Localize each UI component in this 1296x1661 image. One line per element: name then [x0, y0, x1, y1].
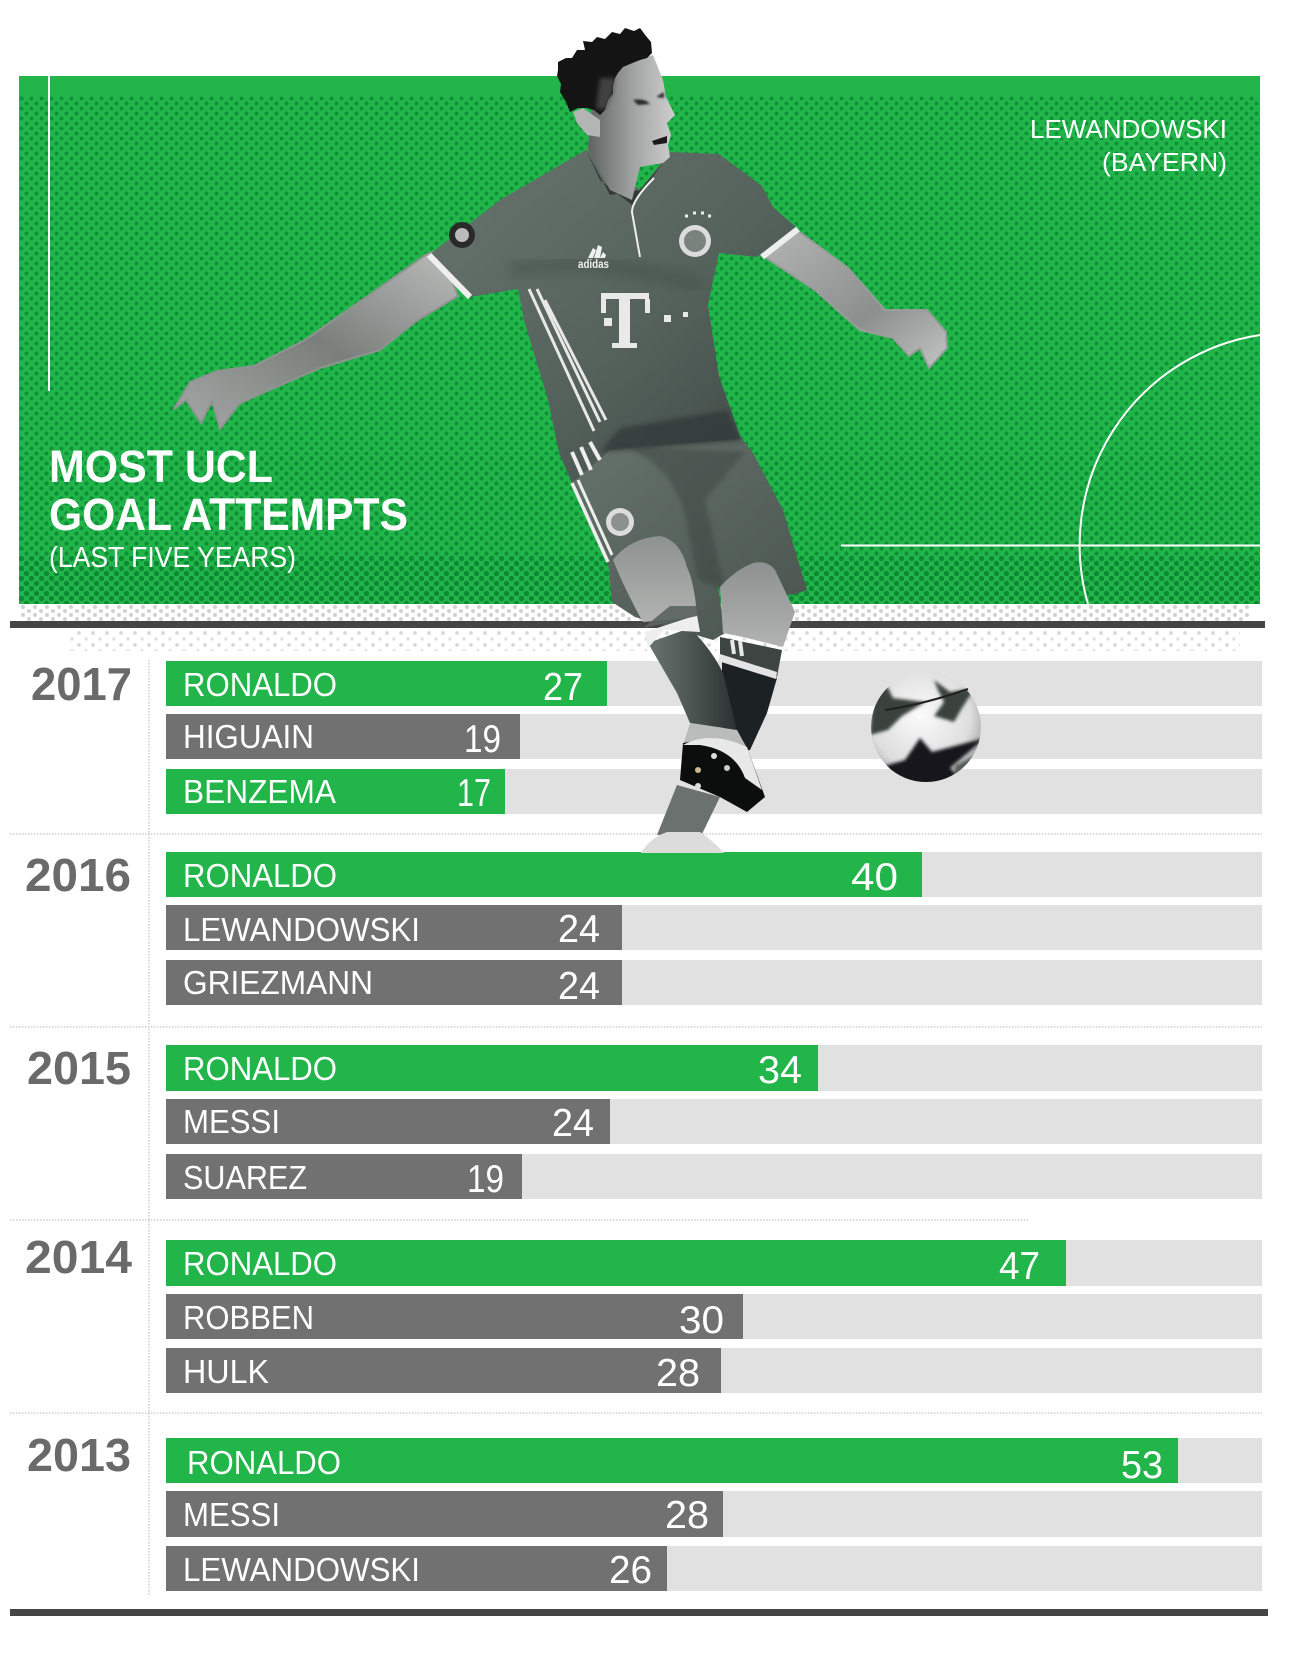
player: head — [557, 28, 675, 200]
section: 2014 — [25, 1231, 1262, 1395]
club crest — [679, 213, 711, 257]
section: 2015: SUAREZ — [183, 1159, 307, 1196]
section: 2015 — [27, 1042, 1262, 1201]
section: 2017: 27 — [543, 666, 583, 709]
title: MOST UCL — [49, 441, 273, 492]
section: 2014: 28 — [656, 1352, 700, 1395]
section: 2015: 2015 — [27, 1042, 131, 1094]
player: shirt — [429, 150, 798, 483]
section: 2013: RONALDO — [187, 1444, 341, 1481]
section: 2016: 40 — [851, 856, 898, 899]
player: left arm — [174, 250, 458, 429]
section: 2016: 24 — [558, 908, 600, 951]
dotted dividers — [10, 660, 1262, 1595]
title — [49, 441, 408, 574]
player: boot with studs — [680, 738, 765, 812]
section: 2017: BENZEMA — [183, 773, 336, 810]
section: 2016: 24 — [558, 965, 600, 1008]
player caption — [1030, 114, 1227, 177]
player: rear leg and boot — [641, 637, 782, 853]
section: 2015: 19 — [467, 1158, 504, 1201]
section: 2014: 47 — [999, 1245, 1040, 1288]
panel: green pitch hero — [19, 76, 1260, 604]
section: 2017: HIGUAIN — [183, 718, 314, 755]
section: 2017: 19 — [464, 718, 501, 761]
section: 2013: MESSI — [183, 1496, 280, 1533]
section: 2013: 2013 — [27, 1429, 131, 1481]
section: 2013: 26 — [609, 1549, 652, 1592]
player: shorts — [560, 436, 807, 640]
section: 2017: 2017 — [31, 658, 132, 710]
section: 2016: 2016 — [25, 849, 131, 901]
section: 2014: ROBBEN — [183, 1299, 314, 1336]
section: 2017 — [31, 658, 1262, 815]
section: 2016: RONALDO — [183, 857, 337, 894]
bottom rule — [10, 1609, 1268, 1616]
section: 2016: LEWANDOWSKI — [183, 911, 420, 948]
section: 2013: LEWANDOWSKI — [183, 1551, 420, 1588]
T logo — [601, 293, 688, 348]
section: 2015: 34 — [758, 1049, 802, 1092]
player caption: LEWANDOWSKI — [1030, 114, 1227, 144]
section: 2013: 28 — [665, 1494, 709, 1537]
player: front shin and sock — [643, 606, 748, 750]
adidas mark: adidas — [578, 257, 609, 271]
player caption: (BAYERN) — [1102, 147, 1227, 177]
section: 2014: 2014 — [25, 1231, 132, 1283]
title: GOAL ATTEMPTS — [49, 489, 408, 540]
section: 2016: GRIEZMANN — [183, 964, 373, 1001]
section: 2014: RONALDO — [183, 1245, 337, 1282]
icon: football — [871, 680, 981, 782]
player: thighs — [613, 536, 795, 647]
player: right arm — [765, 225, 947, 368]
section: 2016 — [25, 849, 1262, 1008]
section: 2017: 17 — [457, 772, 491, 815]
section: 2015: MESSI — [183, 1103, 280, 1140]
section: 2017: RONALDO — [183, 666, 337, 703]
section: 2013: 53 — [1121, 1444, 1163, 1487]
section: 2013 — [27, 1429, 1262, 1592]
section: 2014: HULK — [183, 1353, 269, 1390]
section: 2015: 24 — [552, 1102, 594, 1145]
title: (LAST FIVE YEARS) — [49, 542, 296, 574]
section: 2015: RONALDO — [183, 1050, 337, 1087]
section: 2014: 30 — [679, 1299, 724, 1342]
player: Lewandowski cut-out — [174, 28, 947, 853]
sleeve badge — [449, 222, 475, 248]
halftone band with rule — [10, 605, 1265, 651]
